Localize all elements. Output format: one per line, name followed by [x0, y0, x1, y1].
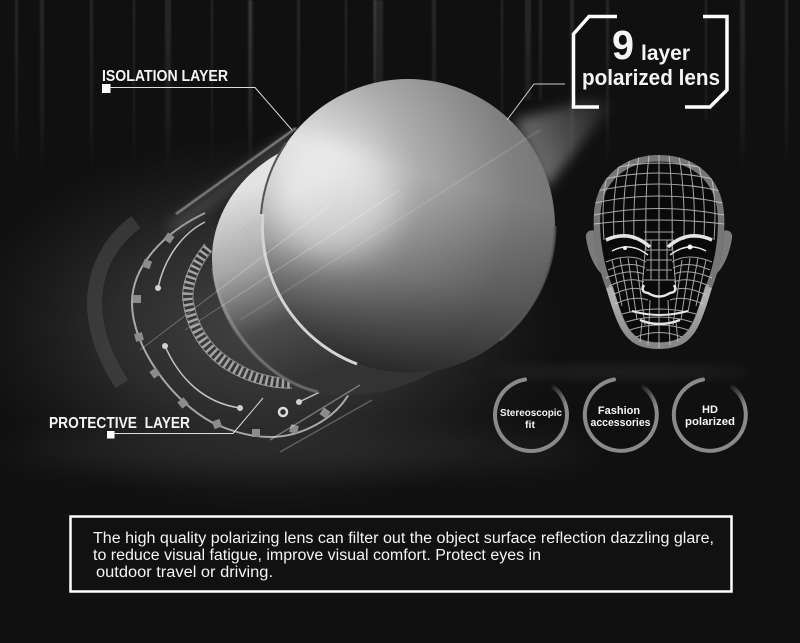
badge: 9 layer polarized lens: polarized lens [582, 65, 720, 90]
faint outer arc [95, 222, 136, 384]
description box [70, 516, 732, 592]
tech ring graphic [95, 213, 350, 437]
inner arcs with dots [158, 222, 205, 288]
feature ring: HD polarized: polarized [685, 416, 735, 428]
front lens [261, 79, 555, 373]
brows and eyes [606, 236, 712, 324]
isolation layer callout: ISOLATION LAYER [102, 68, 228, 85]
badge: 9 layer polarized lens: 9 [612, 22, 634, 68]
feature ring: HD polarized: HD [702, 404, 718, 416]
description box: to reduce visual fatigue, improve visual comfort. Protect eyes in [93, 547, 541, 564]
protective layer callout: PROTECTIVE LAYER [49, 415, 190, 432]
lens leader line [507, 84, 565, 120]
feature ring: fashion accessories: Fashion [598, 405, 640, 417]
diagonal light streaks [140, 130, 540, 452]
feature ring: stereoscopic fit: Stereoscopic [500, 407, 562, 419]
feature ring: stereoscopic fit: fit [525, 419, 535, 431]
diagonal glow edge [165, 130, 292, 234]
badge: 9 layer polarized lens: layer [641, 42, 690, 65]
mesh [594, 153, 724, 348]
feature ring: stereoscopic fit [495, 380, 567, 451]
hatched ring [183, 244, 292, 388]
ears [586, 230, 607, 275]
feature ring: fashion accessories [585, 380, 657, 451]
toothed ring [132, 213, 350, 437]
description box: outdoor travel or driving. [96, 564, 273, 581]
outline band [594, 155, 724, 349]
description box: The high quality polarizing lens can filter out the object surface reflection dazzling glare, [93, 530, 714, 547]
light beam behind lens [515, 100, 612, 190]
back lens [212, 150, 450, 395]
protective layer callout [49, 398, 263, 438]
isolation layer callout [102, 68, 292, 130]
feature ring: fashion accessories: accessories [590, 417, 650, 429]
badge: 9 layer polarized lens [574, 16, 727, 107]
feature ring: HD polarized [674, 380, 746, 451]
wireframe face [586, 150, 732, 355]
